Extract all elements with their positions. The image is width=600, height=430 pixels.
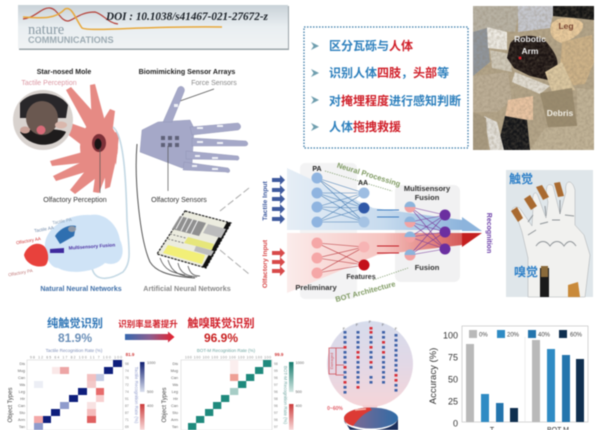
tactile connections — [317, 178, 364, 222]
dashed guides — [220, 188, 249, 274]
row labels: Can — [171, 376, 178, 380]
row labels: Can — [18, 376, 25, 380]
colourbars — [140, 362, 144, 392]
panel: neural network diagram: Features — [346, 274, 376, 281]
star nose shape — [50, 84, 119, 194]
column end labels: F — [382, 323, 385, 327]
label: force sensors: Force Sensors — [191, 80, 237, 87]
panel: neural network diagram — [262, 161, 492, 304]
photo texture — [473, 6, 594, 150]
right-hand rates: 76 — [125, 376, 129, 380]
heading: star-nosed mole: Star-nosed Mole — [37, 69, 91, 76]
chart: tactile confusion matrix: Tactile Recognition Rate (%) — [46, 348, 103, 353]
panel: neural network diagram: AA — [358, 180, 368, 187]
chart: BOT-M confusion matrix — [162, 348, 304, 430]
olfactory wedge — [287, 233, 462, 293]
chart: BOT-M confusion matrix: BOT-M Recognition Rate (%) — [197, 348, 256, 353]
right-hand rates: 96 — [274, 418, 278, 422]
row labels: Dis — [20, 362, 25, 366]
fusion nodes — [404, 202, 416, 260]
row labels: Wa — [172, 383, 179, 387]
row labels — [18, 362, 26, 429]
communications logo text: COMMUNICATIONS — [28, 35, 114, 45]
right-hand rates: 96 — [274, 376, 278, 380]
legend: 60% — [570, 332, 583, 338]
heading: natural neural networks: Natural Neural Networks — [40, 286, 122, 293]
arrow: gradient — [125, 332, 174, 342]
panel: neural network diagram: Multisensory — [404, 184, 451, 193]
label: olfactory: 嗅觉 — [514, 264, 538, 279]
bullet 2: 识别人体四肢，头部等 — [329, 65, 449, 80]
right-hand rates: 74 — [125, 390, 129, 394]
nose centre — [92, 134, 106, 152]
diagonal cells — [42, 360, 122, 423]
panel: natural neural networks: Olfactory PA — [8, 268, 33, 277]
row labels: Sto — [19, 411, 25, 415]
panel: neural network diagram: Fusion — [415, 193, 440, 202]
photo labels: Leg — [558, 21, 574, 31]
robot hand — [140, 86, 248, 173]
text: improvement: 识别率显著提升 — [118, 319, 178, 329]
panel: neural network diagram: Olfactory Input — [262, 239, 269, 288]
row labels: Arm — [171, 418, 178, 422]
chart: BOT-M confusion matrix: BOT-M Recognition Rate (%) — [283, 366, 288, 425]
right-hand rates: 99 — [274, 369, 278, 373]
photo: robotic arm in debris: Robotic — [514, 34, 546, 44]
right-hand rates — [274, 362, 278, 429]
column end labels — [343, 320, 398, 331]
sensor chip — [157, 211, 231, 268]
photo: robotic arm in debris — [473, 6, 594, 150]
row labels: Mug — [18, 369, 25, 373]
right-hand rates: 91 — [125, 397, 129, 401]
label: olfactory sensors: Olfactory Sensors — [151, 197, 207, 204]
row labels: Leg — [19, 390, 25, 394]
other cells — [230, 360, 238, 395]
chart: tactile confusion matrix: 81.9 — [126, 352, 135, 357]
right-hand rates: 71 — [125, 418, 129, 422]
panel: recognition comparison header — [47, 316, 255, 345]
other cells — [34, 367, 104, 430]
tactile wedge — [287, 168, 462, 230]
panel: neural network diagram: Fusion — [415, 263, 440, 272]
row labels: Leg — [172, 390, 178, 394]
bullet 4: 人体拖拽救援 — [329, 119, 401, 134]
panel: natural neural networks: Tactile PA — [52, 217, 72, 225]
olfactory pointer — [99, 148, 101, 193]
chart: BOT-M confusion matrix: 500 — [296, 390, 302, 394]
value: 81.9%: 81.9% — [58, 331, 92, 345]
bars BOT-M — [532, 340, 584, 422]
label: tactile perception: Tactile Perception — [21, 80, 77, 87]
chart: BOT-M confusion matrix: 1000 — [296, 361, 304, 365]
bullet 1: 区分瓦砾与人体 — [329, 38, 413, 53]
chart: tactile confusion matrix: 98 12 65 64 17 82 100 11 7 100 100 — [30, 356, 122, 360]
bullet 3: 对掩埋程度进行感知判断 — [329, 93, 461, 108]
chart: tactile confusion matrix — [8, 348, 155, 430]
finger joints — [528, 200, 576, 246]
right-hand rates: 98 — [125, 362, 129, 366]
row labels: Tan — [172, 425, 178, 429]
olfactory bulb — [24, 244, 48, 267]
title: tactile recognition: 纯触觉识别 — [47, 316, 103, 330]
olfactory input arrows — [272, 248, 285, 276]
row labels: Wa — [19, 383, 26, 387]
legend: 0% — [479, 332, 488, 338]
right-hand rates: 87 — [125, 411, 129, 415]
AA nodes — [358, 188, 370, 228]
right-hand rates — [125, 362, 129, 429]
right-hand rates: 72 — [125, 383, 129, 387]
chart: tactile confusion matrix: 400 — [147, 404, 153, 408]
right-hand rates: 97 — [274, 383, 278, 387]
panel: star-nosed mole — [13, 69, 129, 278]
right-hand rates: 97 — [274, 425, 278, 429]
row labels: Arm — [18, 418, 25, 422]
chart: BOT-M confusion matrix: 400 — [296, 404, 302, 408]
row labels — [171, 362, 179, 429]
heading: sensor arrays: Biomimicking Sensor Arrays — [139, 68, 235, 76]
axis tick labels: 75 — [448, 352, 458, 362]
hand sensor dots — [161, 136, 179, 147]
label: olfactory perception: Olfactory Perception — [43, 197, 107, 204]
column end labels: F — [369, 320, 372, 324]
column end labels: F — [356, 323, 359, 327]
pie chart — [344, 418, 398, 430]
panel: natural neural networks — [8, 215, 123, 293]
axis title: Accuracy (%) — [428, 348, 439, 404]
panel: biomimicking sensor arrays — [136, 68, 248, 278]
network labels: PA — [312, 166, 322, 173]
chart: BOT-M confusion matrix: 100 100 100 100 100 100 100 100 100 100 — [185, 356, 271, 360]
panel: neural network diagram: Neural Processing — [336, 161, 402, 189]
chart: tactile confusion matrix: 1000 — [147, 361, 155, 365]
olfactory strip — [540, 268, 549, 297]
right-hand rates: 98 — [274, 362, 278, 366]
heading: artificial neural networks: Artificial Neural Networks — [143, 284, 231, 293]
mid arrows — [377, 210, 399, 217]
panel: feature list — [304, 27, 468, 148]
panel: artificial neural networks — [143, 188, 249, 293]
dotted guides — [325, 171, 392, 191]
value: 96.9%: 96.9% — [204, 331, 238, 345]
row labels: Dis — [173, 362, 178, 366]
photo: robotic arm in debris: Debris — [547, 108, 573, 118]
legend — [469, 330, 583, 338]
chart: tactile confusion matrix: Tactile Recognition Rate (%) — [134, 367, 139, 424]
damaged bracket — [329, 348, 344, 375]
olfactory nodes — [312, 238, 370, 278]
panel: sensor damage disc — [327, 320, 413, 430]
nature logo text: nature — [28, 22, 64, 38]
column end labels: F — [395, 327, 398, 331]
colourbars — [289, 362, 294, 392]
chart: accuracy bar chart — [428, 326, 588, 430]
finger tips — [511, 182, 564, 222]
chart: BOT-M confusion matrix: 99.9 — [275, 352, 284, 357]
row labels: Can — [171, 404, 178, 408]
fusion connections — [410, 207, 445, 255]
right-hand rates: 97 — [274, 411, 278, 415]
force sensor pointer — [180, 89, 214, 101]
panel: neural network diagram: Recognition — [485, 213, 492, 253]
mole photo — [13, 90, 73, 150]
banner: journal DOI — [18, 5, 289, 50]
legend: 20% — [507, 332, 520, 338]
diagonal cells — [188, 360, 271, 430]
right-hand rates: 96 — [274, 404, 278, 408]
right-hand rates: 96 — [274, 390, 278, 394]
row labels: Hir — [173, 397, 179, 401]
row labels: Hir — [20, 397, 26, 401]
PA nodes — [312, 172, 322, 228]
title: fusion recognition: 触嗅联觉识别 — [187, 316, 255, 330]
chip inner — [163, 216, 226, 264]
panel: neural network diagram: BOT Architecture — [334, 279, 396, 304]
photo: robotic arm in debris: Arm — [521, 46, 539, 56]
axis tick labels: 0 — [453, 418, 458, 428]
recognition arrow heads — [462, 217, 482, 231]
row labels: Tan — [19, 425, 25, 429]
olfactory connections — [317, 243, 364, 273]
row labels: Can — [18, 404, 25, 408]
column end labels: F — [343, 327, 346, 331]
panel: natural neural networks: Olfactory AA — [16, 236, 41, 245]
tactile input arrows — [272, 175, 285, 224]
axis tick labels — [443, 330, 458, 428]
olfactory pointer and cable — [167, 146, 169, 191]
photo: sensor glove — [506, 170, 593, 297]
panel: sensor damage disc: Damaged — [330, 353, 334, 369]
sensor columns — [344, 331, 398, 394]
bars T — [466, 344, 518, 422]
tactile region — [55, 225, 76, 244]
palm — [512, 182, 590, 297]
label: damage range: 0~60% — [327, 406, 343, 412]
damaged sensors — [344, 327, 398, 389]
right-hand rates: 74 — [125, 369, 129, 373]
chart: tactile confusion matrix: 500 — [147, 390, 153, 394]
cables — [160, 258, 200, 277]
label: tactile: 触觉 — [509, 171, 533, 186]
background panels — [300, 163, 357, 299]
row labels: Mug — [171, 369, 178, 373]
nerve line to brain — [92, 127, 129, 278]
DOI text: DOI : 10.1038/s41467-021-27672-z — [105, 11, 269, 23]
right-hand rates: 87 — [125, 404, 129, 408]
logo waves — [23, 8, 222, 29]
fusion region — [50, 248, 64, 253]
axis tick labels: 25 — [448, 396, 458, 406]
input labels: Tactile Input — [262, 181, 269, 221]
separator — [524, 337, 526, 422]
output nodes — [440, 210, 450, 254]
link wedge — [362, 405, 378, 416]
panel: natural neural networks: Multisensory Fusion — [68, 242, 115, 252]
brain — [45, 215, 123, 272]
right-hand rates: 69 — [125, 425, 129, 429]
legend: 40% — [538, 332, 551, 338]
panel: neural network diagram: Preliminary — [295, 283, 337, 292]
row labels: Sto — [172, 411, 178, 415]
axis tick labels: 50 — [448, 374, 458, 384]
axis tick labels: 100 — [443, 330, 458, 340]
right-hand rates: 98 — [274, 397, 278, 401]
axis label: Object Types — [162, 388, 168, 422]
axis label: Object Types — [8, 388, 14, 422]
brain labels: Tactile AA — [34, 225, 54, 233]
